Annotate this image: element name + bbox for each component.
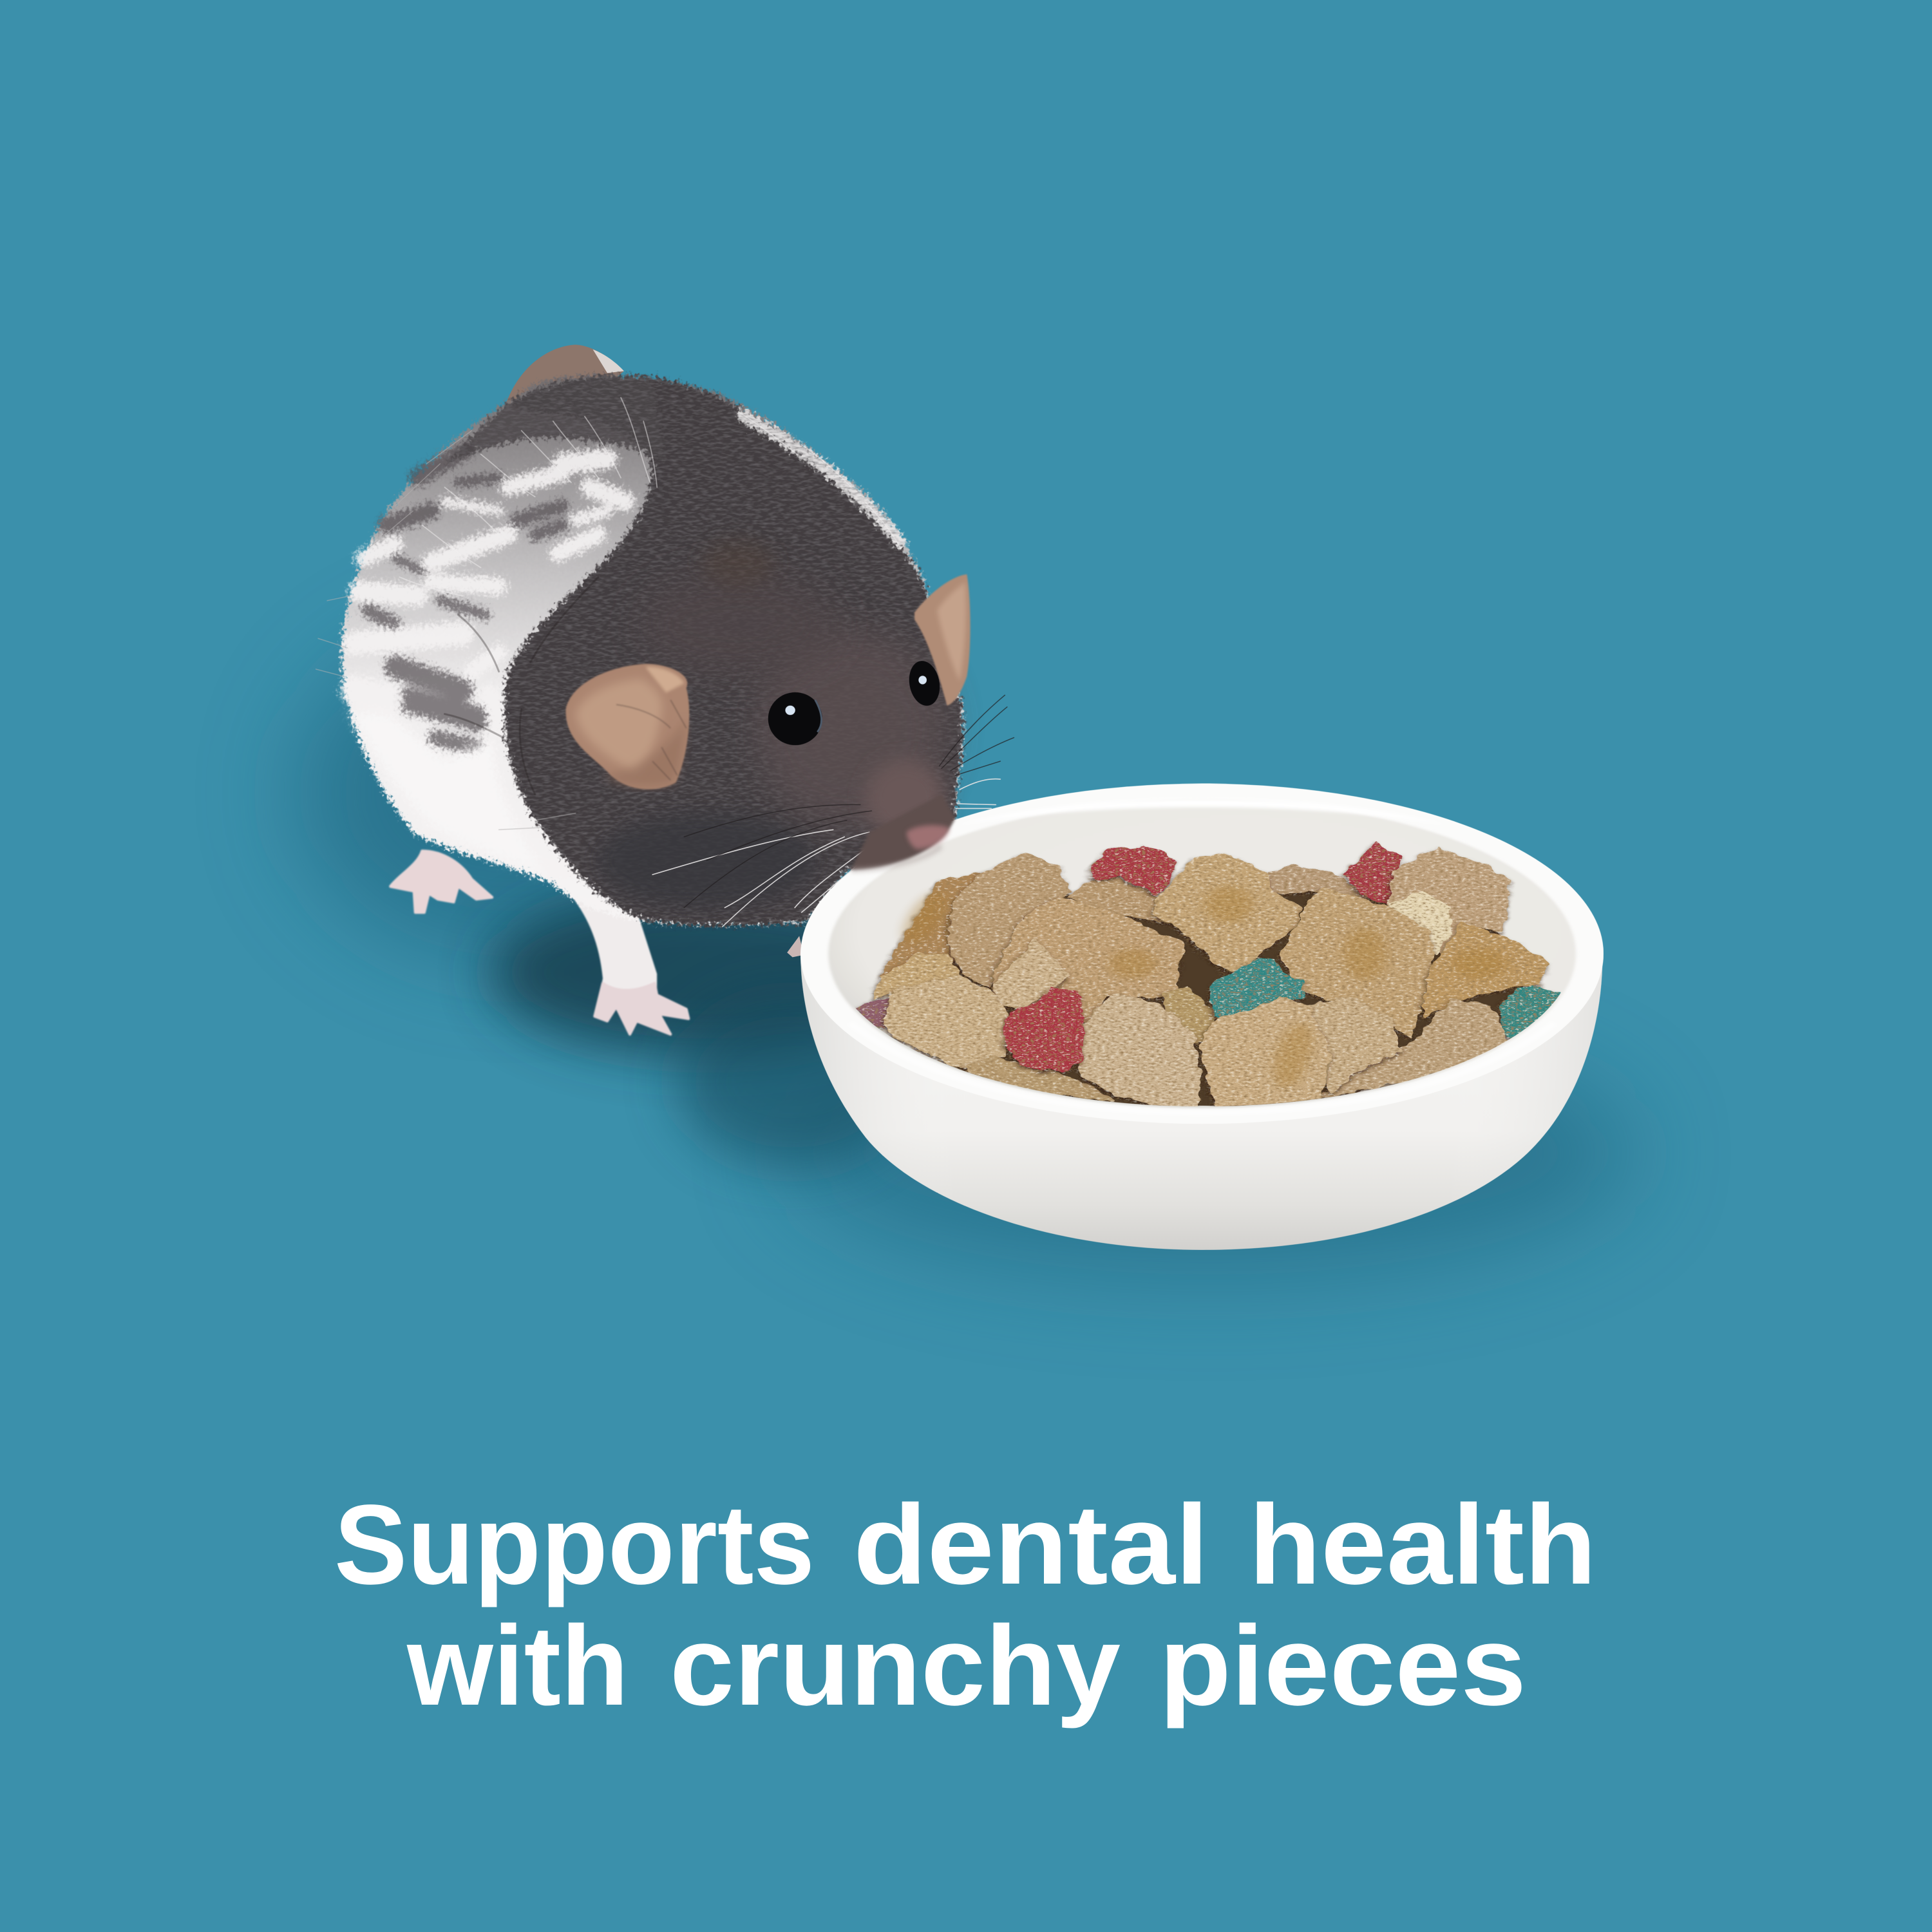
ridge white streak	[743, 415, 901, 543]
upper back dark band	[444, 376, 666, 464]
rat face shading	[598, 539, 946, 907]
rat snout over bowl	[851, 794, 955, 870]
rat fur hairs	[316, 397, 901, 829]
rat rump hump	[506, 345, 624, 404]
dark fur mass	[504, 376, 962, 925]
rat dark fur	[444, 376, 962, 925]
rat body fur	[341, 375, 963, 924]
ground shadows	[296, 625, 1636, 1275]
rat hind foot	[390, 851, 492, 913]
headline line 1: dental	[853, 1482, 1209, 1608]
headline line 1	[334, 1482, 1596, 1608]
rat whiskers	[652, 695, 1014, 927]
rat front leg and foot	[553, 875, 688, 1034]
headline line 2: with	[406, 1603, 629, 1729]
headline	[334, 1482, 1596, 1729]
rat far ear	[914, 574, 971, 706]
bowl outer body	[800, 954, 1602, 1250]
headline line 2: crunchy	[670, 1603, 1121, 1729]
pile base shadow	[935, 891, 1524, 1106]
headline line 2: pieces	[1159, 1603, 1526, 1729]
kibble toast tones	[894, 886, 1506, 1090]
rat	[316, 345, 1014, 1034]
lower white flank	[350, 709, 544, 875]
headline line 1: Supports	[334, 1482, 815, 1608]
kibble pieces	[858, 844, 1560, 1107]
rim overlap highlight	[849, 1023, 1555, 1113]
bowl	[800, 784, 1604, 1250]
headline line 1: health	[1249, 1482, 1596, 1608]
food pile	[858, 844, 1560, 1107]
headline line 2	[406, 1603, 1526, 1729]
bowl inner wall	[828, 799, 1576, 1108]
rat large ear	[565, 664, 689, 790]
rat nose	[906, 825, 950, 849]
mottled back streaks, white	[354, 459, 625, 723]
mottled back streaks, dark	[368, 450, 562, 747]
infographic canvas	[278, 345, 1637, 1728]
bowl rim	[800, 784, 1604, 1124]
bowl top highlight	[956, 799, 1448, 826]
rat near eye	[768, 692, 822, 745]
rat rear small foot	[787, 936, 804, 957]
rat far eye	[905, 658, 943, 709]
body base	[341, 375, 963, 924]
